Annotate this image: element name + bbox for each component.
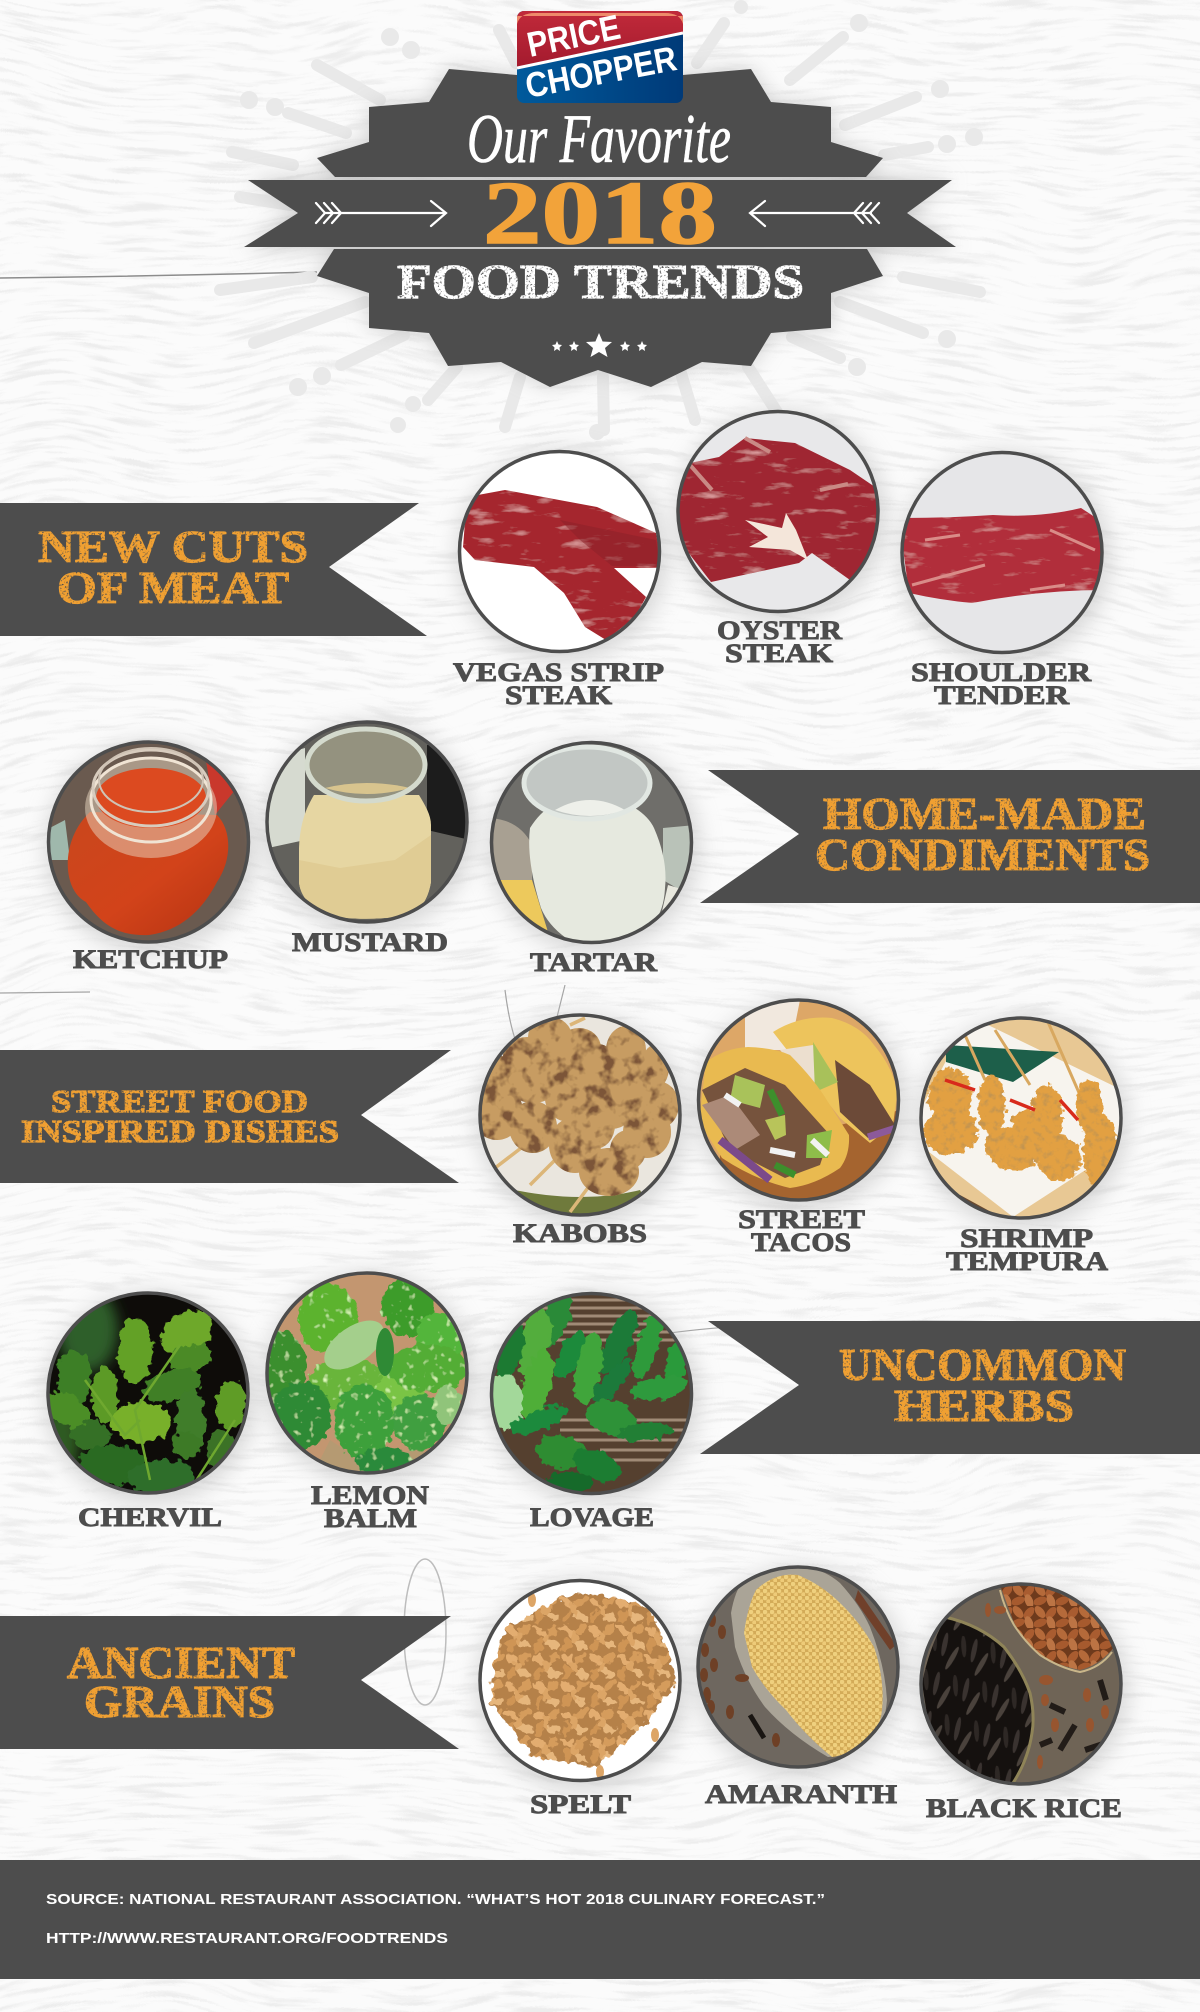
item: shrimp tempura: TEMPURA [946, 1247, 1108, 1276]
item: mustard [260, 715, 480, 957]
banner: street food inspired dishes: INSPIRED DISHES [21, 1113, 339, 1149]
item: amaranth: AMARANTH [705, 1780, 897, 1809]
item: shoulder tender: TENDER [934, 681, 1069, 710]
badge shadow [244, 69, 956, 387]
item: black rice [910, 1575, 1130, 1823]
item: shoulder tender [895, 445, 1115, 710]
item: shoulder tender: SHOULDER [911, 658, 1091, 687]
banner: uncommon herbs: HERBS [894, 1381, 1074, 1431]
item: kabobs: KABOBS [513, 1219, 647, 1248]
item: lovage [485, 1285, 705, 1532]
panel: street food inspired dishes [0, 990, 1135, 1276]
heading: Our Favorite: Our Favorite [467, 101, 731, 178]
panel: uncommon herbs [37, 1265, 1200, 1533]
banner: uncommon herbs [700, 1321, 1200, 1454]
icon: left arrow [316, 201, 446, 226]
footer: source panel [0, 1860, 1200, 1979]
item: kabobs [470, 1005, 690, 1248]
banner: ancient grains [0, 1616, 459, 1749]
item: amaranth [690, 1555, 910, 1809]
panel: home-made condiments [40, 715, 1200, 977]
item: lovage: LOVAGE [530, 1503, 654, 1532]
badge upper body [317, 69, 883, 177]
item: spelt: SPELT [530, 1790, 631, 1819]
item: vegas strip steak: STEAK [505, 681, 613, 710]
banner: new cuts of meat: NEW CUTS [38, 522, 308, 572]
item: lemon balm: LEMON [311, 1481, 429, 1510]
item: oyster steak [670, 400, 890, 668]
banner: street food inspired dishes: STREET FOOD [51, 1083, 308, 1119]
Price Chopper logo: PRICE [524, 8, 624, 65]
banner: ancient grains: GRAINS [84, 1677, 275, 1727]
year ribbon [244, 180, 956, 247]
icon: row of stars [552, 333, 647, 357]
item: spelt [470, 1570, 690, 1819]
banner: home-made condiments [700, 770, 1200, 903]
panel: ancient grains [0, 1555, 1130, 1823]
icon: right arrow [750, 201, 879, 226]
item: chervil [37, 1285, 260, 1532]
panel: new cuts of meat [0, 400, 1115, 710]
banner: new cuts of meat [0, 503, 427, 636]
item: chervil: CHERVIL [78, 1503, 222, 1532]
item: shrimp tempura: SHRIMP [960, 1224, 1093, 1253]
banner: home-made condiments: HOME-MADE [823, 789, 1146, 839]
banner: street food inspired dishes [0, 1050, 459, 1183]
item: shrimp tempura [915, 1010, 1135, 1276]
item: vegas strip steak [450, 440, 670, 710]
item: mustard: MUSTARD [292, 928, 448, 957]
banner: uncommon herbs: UNCOMMON [839, 1340, 1126, 1390]
banner: ancient grains: ANCIENT [67, 1638, 295, 1688]
Price Chopper logo [517, 8, 683, 106]
item: street tacos [690, 990, 910, 1257]
item: oyster steak: OYSTER [717, 616, 842, 645]
item: lemon balm [258, 1265, 480, 1533]
Price Chopper logo: CHOPPER [522, 39, 680, 106]
item: street tacos: STREET [738, 1205, 865, 1234]
item: black rice: BLACK RICE [926, 1794, 1122, 1823]
decorative sunburst rays behind the badge [220, 0, 983, 440]
heading: 2018: 2018 [483, 164, 717, 263]
heading: Food Trends: FOOD TRENDS [397, 254, 804, 309]
banner: home-made condiments: CONDIMENTS [815, 830, 1150, 880]
item: vegas strip steak: VEGAS STRIP [453, 658, 664, 687]
source text: SOURCE: NATIONAL RESTAURANT ASSOCIATION. “WHAT’S HOT 2018 CULINARY FORECAST.” [46, 1891, 825, 1908]
item: lemon balm: BALM [324, 1504, 417, 1533]
item: tartar: TARTAR [530, 948, 657, 977]
title badge [244, 8, 956, 387]
item: street tacos: TACOS [751, 1228, 851, 1257]
item: tartar [485, 735, 705, 977]
item: oyster steak: STEAK [725, 639, 834, 668]
item: ketchup [40, 735, 260, 974]
badge lower body [317, 249, 883, 387]
banner: new cuts of meat: OF MEAT [57, 563, 289, 613]
source url: HTTP://WWW.RESTAURANT.ORG/FOODTRENDS [46, 1930, 448, 1947]
item: ketchup: KETCHUP [73, 945, 228, 974]
